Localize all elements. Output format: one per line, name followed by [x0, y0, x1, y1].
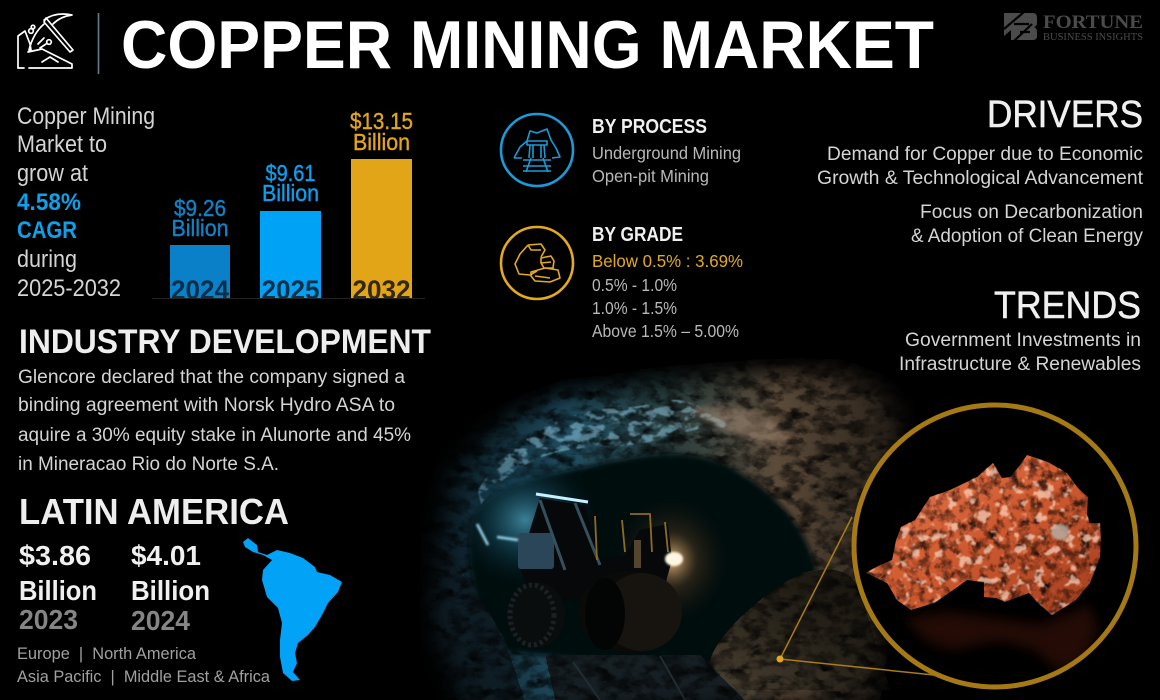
bar 2024: Billion: [172, 215, 228, 241]
text block: trends: [899, 330, 1141, 375]
rock walls: [420, 358, 915, 700]
text block: trends: Government Investments in: [905, 330, 1141, 351]
brown rock patch: [690, 406, 790, 444]
text block: CAGR summary: CAGR: [17, 217, 77, 244]
stat: 2023 value: 2023: [19, 604, 78, 635]
bar 2032: Billion: [353, 129, 410, 155]
bar 2032: 2032: [352, 275, 410, 305]
bar 2025: Billion: [262, 180, 319, 206]
list: grade segments: [592, 251, 743, 341]
list: grade segments: Above 1.5% – 5.00%: [592, 321, 739, 341]
logo: Fortune Business Insights: [1004, 12, 1143, 43]
icon: miner with pickaxe: [18, 14, 73, 68]
text block: trends: Infrastructure & Renewables: [899, 354, 1141, 375]
floor tracks: [545, 655, 745, 700]
text block: industry development: binding agreement with Norsk Hydro ASA to: [18, 395, 395, 416]
track rails: [573, 656, 685, 700]
text block: drivers: & Adoption of Clean Energy: [911, 226, 1143, 247]
heading: drivers: DRIVERS: [987, 94, 1143, 136]
nugget highlights: [866, 455, 1101, 615]
text block: other regions: Europe | North America: [17, 644, 197, 663]
text block: industry development: Glencore declared that the company signed a: [18, 367, 405, 388]
text block: drivers: Demand for Copper due to Economic: [827, 144, 1143, 165]
heading: trends: TRENDS: [994, 285, 1141, 327]
heading: industry development: INDUSTRY DEVELOPMENT: [19, 323, 431, 361]
title: COPPER MINING MARKET: [121, 7, 934, 83]
text block: industry development: [18, 367, 411, 475]
icon: mine entrance: [501, 114, 573, 186]
callout: anchor dot: [776, 656, 784, 662]
heading: by grade: BY GRADE: [592, 224, 683, 246]
callout: copper ore lens: [854, 405, 1136, 687]
stat: 2023 value: [19, 540, 97, 635]
stat: 2024 value: [131, 540, 210, 636]
photo: underground mine tunnel: [420, 358, 915, 700]
callout: connector lines: [780, 517, 934, 675]
logo: Fortune Business Insights: FORTUNE: [1043, 12, 1143, 33]
bar 2024: [170, 195, 230, 305]
list: process segments: Open-pit Mining: [592, 166, 709, 186]
map: Latin America: [243, 538, 342, 681]
heading: Latin America: LATIN AMERICA: [19, 491, 289, 532]
text block: industry development: in Mineracao Rio do Norte S.A.: [18, 454, 279, 475]
left dark wall: [437, 538, 525, 700]
list: grade segments: 1.0% - 1.5%: [592, 298, 677, 318]
bar 2025: $9.61: [266, 160, 316, 186]
text block: CAGR summary: during: [17, 246, 77, 273]
list: grade segments: 0.5% - 1.0%: [592, 275, 677, 295]
blue glow: [466, 461, 583, 576]
text block: CAGR summary: grow at: [17, 160, 88, 187]
tunnel interior: [469, 454, 821, 670]
text block: CAGR summary: Copper Mining: [17, 103, 155, 130]
list: process segments: [592, 143, 741, 186]
text block: other regions: Asia Pacific | Middle East & Africa: [17, 667, 271, 686]
list: grade segments: Below 0.5% : 3.69%: [592, 251, 743, 271]
icon: ore rocks: [501, 227, 573, 299]
stat: 2023 value: $3.86: [19, 540, 91, 571]
text block: CAGR summary: 4.58%: [17, 189, 81, 216]
ore reflection: [905, 605, 1098, 672]
stat: 2023 value: Billion: [19, 575, 97, 606]
text block: CAGR summary: 2025-2032: [17, 275, 121, 302]
list: process segments: Underground Mining: [592, 143, 741, 163]
text block: industry development: aquire a 30% equity stake in Alunorte and 45%: [18, 425, 411, 446]
rear light: [477, 524, 518, 545]
stat: 2024 value: Billion: [131, 575, 210, 606]
text block: drivers: [817, 144, 1144, 247]
copper nugget: [866, 455, 1101, 615]
divider: [98, 13, 100, 74]
text block: CAGR summary: [17, 103, 155, 302]
headlamp: [665, 552, 683, 566]
grey mineral inclusion: [1051, 524, 1069, 540]
bar 2024: 2024: [171, 275, 229, 305]
bar 2032: [350, 108, 413, 305]
stat: 2024 value: $4.01: [131, 540, 201, 571]
heading: by process: BY PROCESS: [592, 116, 707, 138]
text block: drivers: Growth & Technological Advancement: [817, 168, 1144, 189]
logo: Fortune Business Insights: BUSINESS INSIGHTS: [1043, 32, 1143, 43]
warm light glow: [628, 510, 718, 609]
bar 2032: $13.15: [350, 108, 413, 134]
bar 2024: $9.26: [174, 195, 226, 221]
stat: 2024 value: 2024: [131, 605, 190, 636]
bar 2025: 2025: [262, 275, 320, 305]
text block: other regions: [17, 644, 271, 686]
bar chart: market size: [152, 108, 425, 305]
text block: CAGR summary: Market to: [17, 131, 107, 158]
light bar: [536, 494, 588, 502]
rock pile: [705, 569, 890, 690]
loader machine: [507, 498, 682, 653]
axis line: [152, 298, 425, 300]
bar 2025: [260, 160, 321, 305]
text block: drivers: Focus on Decarbonization: [920, 202, 1143, 223]
ceiling highlights: [478, 400, 735, 505]
